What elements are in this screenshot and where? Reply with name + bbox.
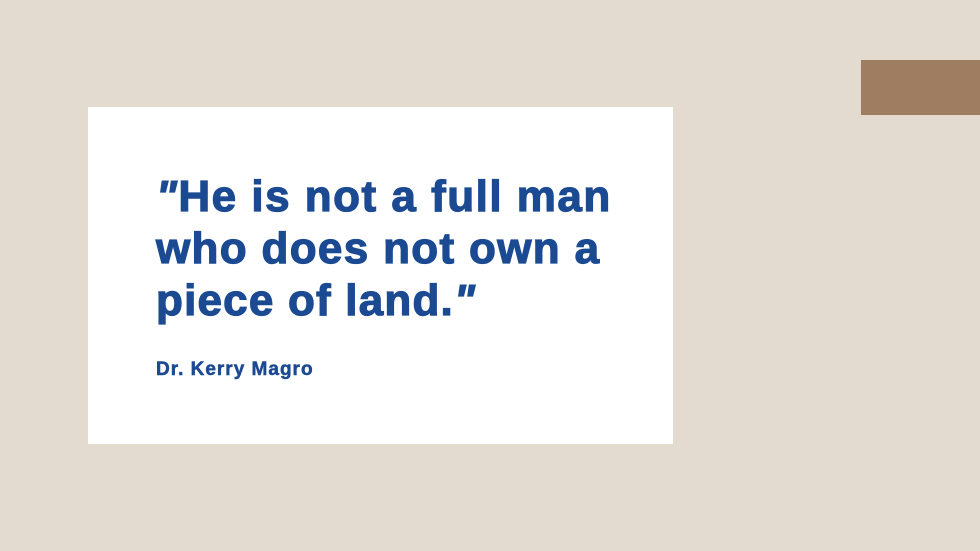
quote text: "He is not a full man [156,172,612,221]
quote text: piece of land." [156,276,476,325]
quote text [155,172,612,325]
attribution: Dr. Kerry Magro [156,359,314,380]
panel: quote card [88,107,673,444]
accent rectangle [861,60,980,115]
quote text: who does not own a [156,224,600,273]
